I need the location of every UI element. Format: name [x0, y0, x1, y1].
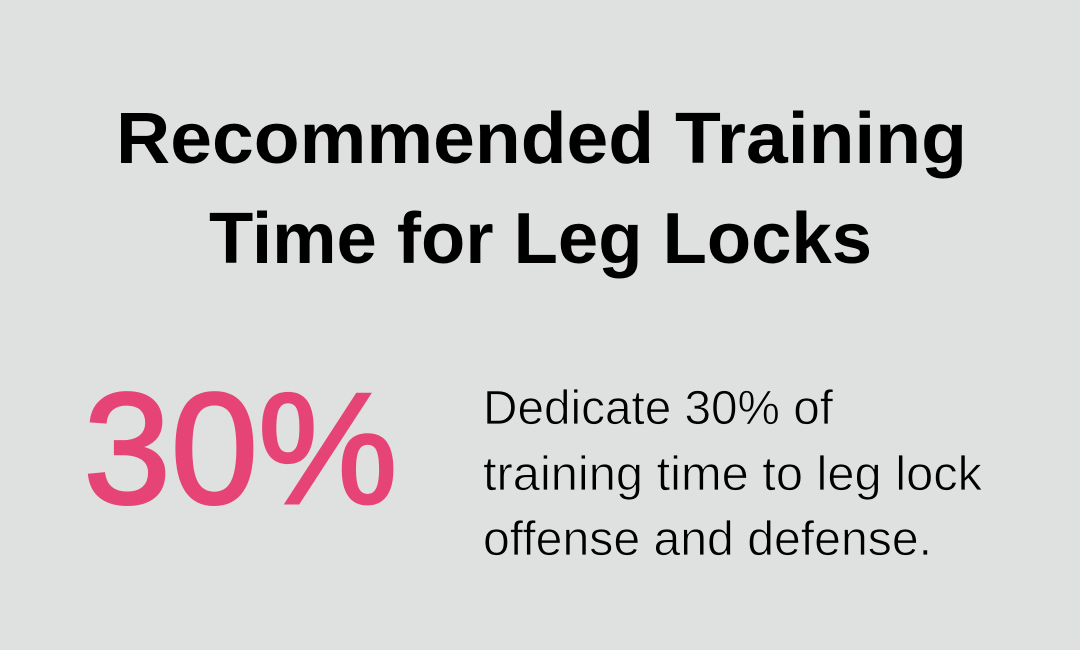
description text: training time to leg lock [483, 448, 983, 501]
big statistic: 30%: 30% [84, 361, 398, 537]
description text: offense and defense. [483, 513, 932, 566]
description text: Dedicate 30% of [483, 382, 834, 435]
description text [483, 382, 983, 566]
title: Recommended Training [116, 99, 967, 179]
title [116, 99, 967, 279]
title: Time for Leg Locks [209, 199, 872, 279]
